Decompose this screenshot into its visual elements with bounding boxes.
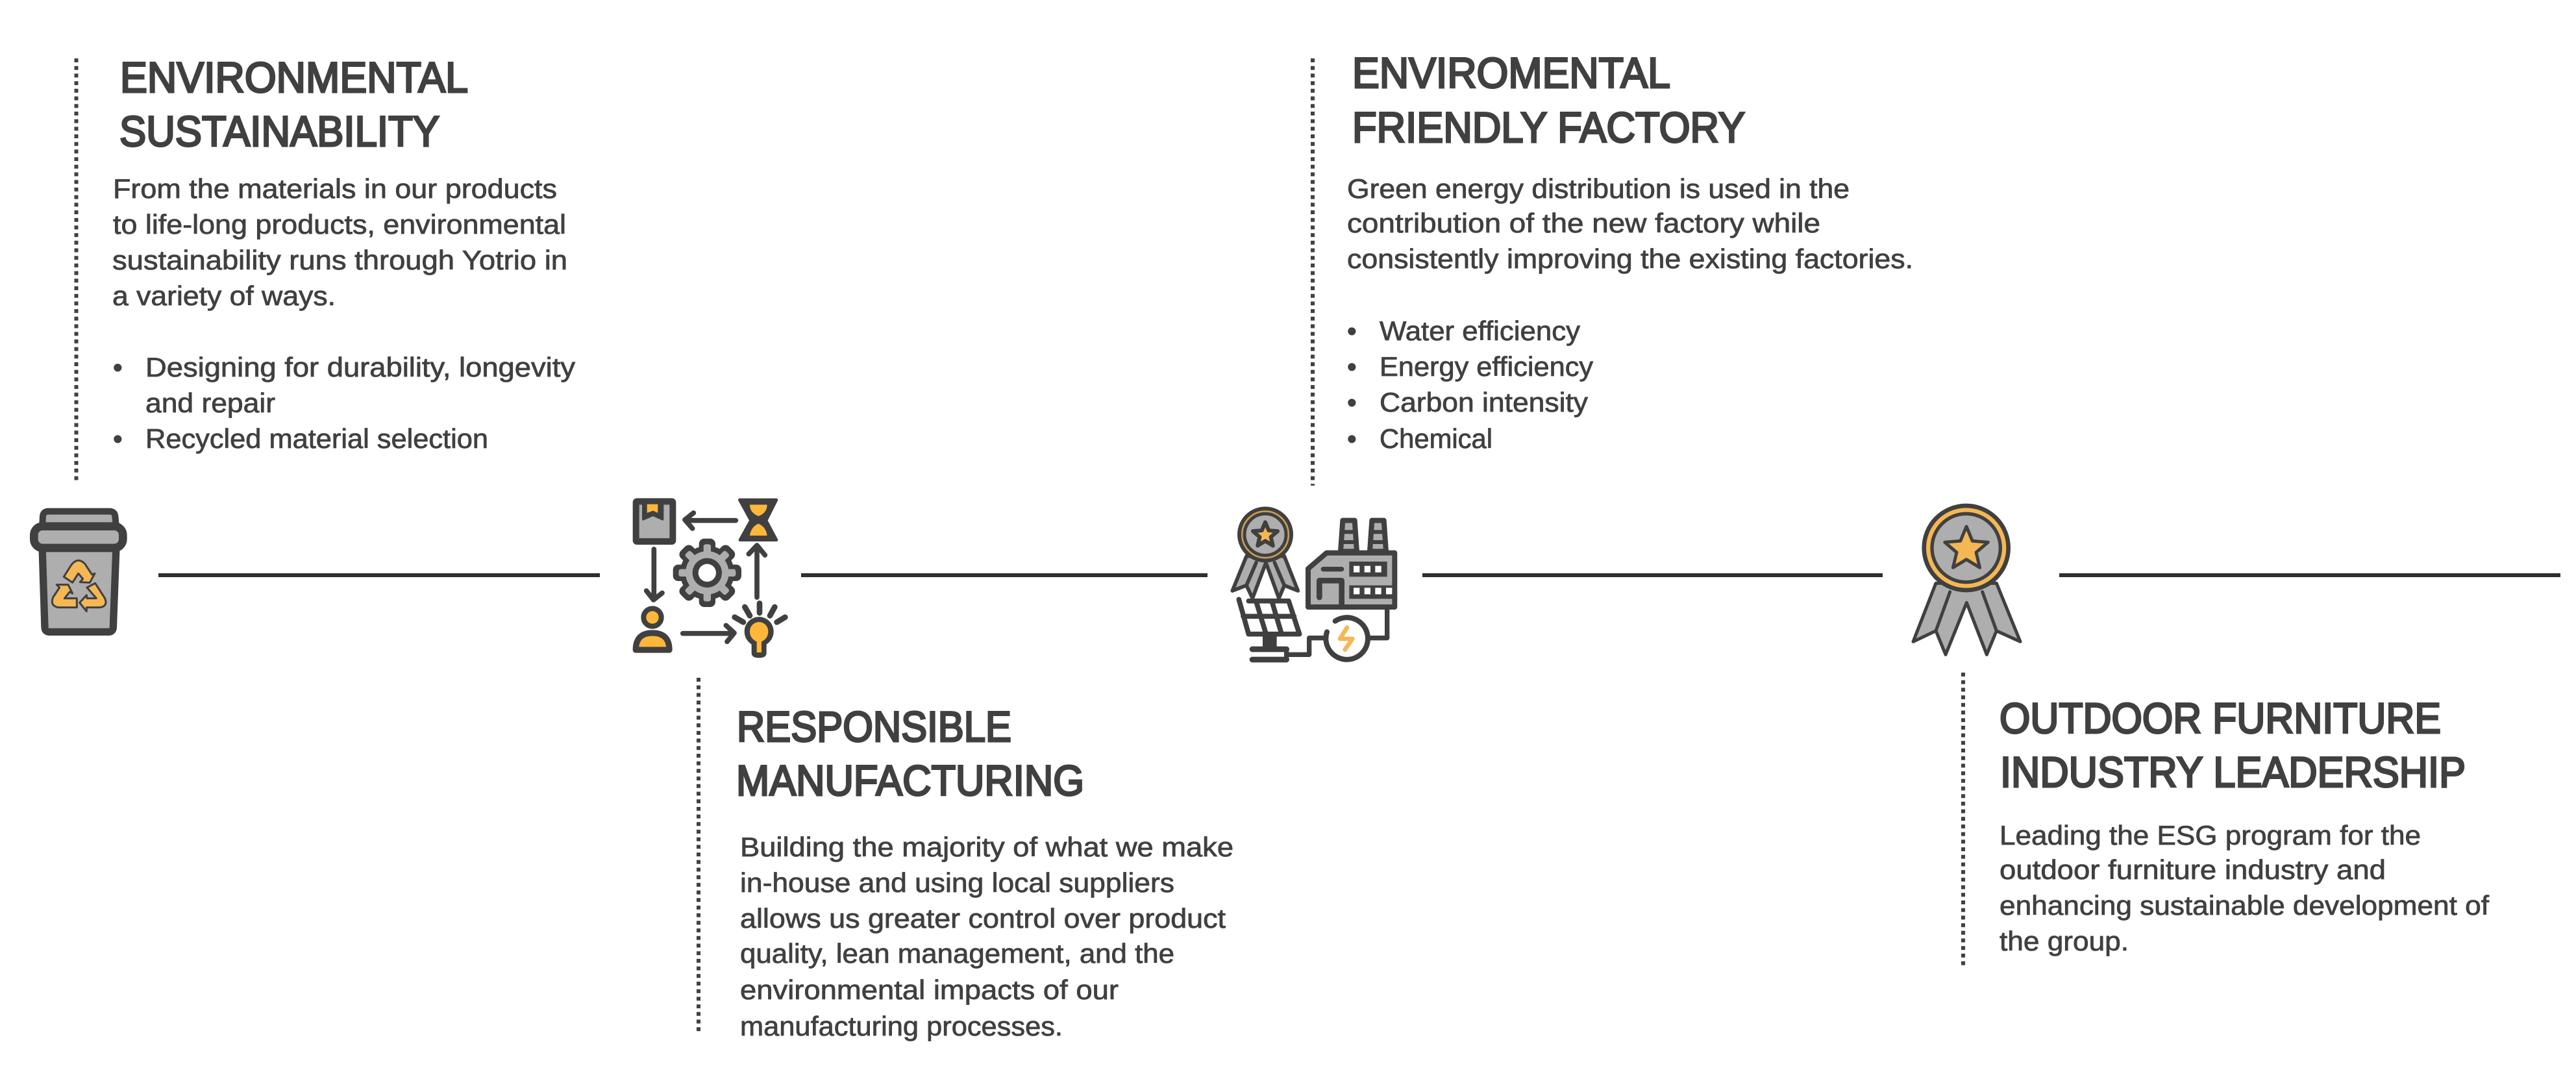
bullet list: environmental sustainability: Designing for durability, longevity	[145, 352, 575, 382]
bullet list: environmental sustainability: •	[113, 423, 123, 454]
panel: responsible manufacturing	[699, 678, 1233, 1041]
heading: environmental sustainability: SUSTAINABILITY	[119, 107, 440, 155]
heading: responsible manufacturing: MANUFACTURING	[736, 756, 1084, 804]
icon: manufacturing process cycle	[636, 500, 785, 658]
icon part: factory	[1308, 521, 1394, 607]
heading: responsible manufacturing: RESPONSIBLE	[737, 702, 1011, 750]
text block: responsible manufacturing description: allows us greater control over product	[740, 903, 1226, 934]
icon part: cycle arrows	[647, 513, 765, 641]
text block: environmental sustainability description: a variety of ways.	[112, 280, 336, 311]
icon part: hourglass	[739, 500, 776, 540]
text block: leadership description: the group.	[2000, 926, 2129, 956]
icon: factory with medal and solar panel	[1232, 508, 1394, 660]
bullet list: environmental sustainability: •	[113, 352, 123, 382]
text block: responsible manufacturing description: Building the majority of what we make	[740, 832, 1233, 862]
icon part: medal	[1232, 508, 1298, 599]
text block: responsible manufacturing description	[740, 832, 1233, 1041]
timeline connector lines	[158, 573, 2560, 577]
text block: factory description: Green energy distribution is used in the	[1347, 173, 1850, 204]
bullet list: environmental sustainability	[113, 352, 575, 454]
heading: outdoor furniture industry leadership: INDUSTRY LEADERSHIP	[2000, 748, 2466, 796]
bullet list: environmental sustainability: Recycled material selection	[145, 423, 488, 454]
text block: environmental sustainability description: to life-long products, environmental	[113, 209, 566, 240]
bullet list: factory efficiencies: Water efficiency	[1380, 316, 1580, 346]
panel: environmental friendly factory	[1313, 49, 1913, 486]
icon: award ribbon	[1913, 506, 2020, 654]
text block: responsible manufacturing description: in-house and using local suppliers	[740, 867, 1174, 898]
heading: environmental sustainability: ENVIRONMENTAL	[120, 53, 468, 101]
text block: leadership description: outdoor furniture industry and	[2000, 854, 2386, 885]
panel: environmental sustainability	[77, 53, 575, 480]
heading: outdoor furniture industry leadership	[2000, 694, 2466, 796]
heading: responsible manufacturing	[736, 702, 1084, 804]
heading: environmental sustainability	[119, 53, 468, 155]
icon part: energy circle	[1326, 608, 1387, 660]
text block: responsible manufacturing description: quality, lean management, and the	[740, 938, 1174, 969]
text block: responsible manufacturing description: environmental impacts of our	[740, 974, 1119, 1005]
text block: leadership description: Leading the ESG program for the	[2000, 820, 2421, 850]
bullet list: factory efficiencies	[1347, 316, 1593, 454]
heading: enviromental friendly factory: FRIENDLY FACTORY	[1352, 103, 1745, 151]
heading: outdoor furniture industry leadership: OUTDOOR FURNITURE	[2000, 694, 2441, 742]
icon part: light bulb	[735, 603, 785, 658]
bullet list: factory efficiencies: Carbon intensity	[1380, 387, 1588, 417]
bullet list: factory efficiencies: •	[1347, 351, 1357, 382]
icon part: box	[636, 501, 673, 541]
bullet list: factory efficiencies: •	[1347, 387, 1357, 417]
text block: environmental sustainability description: sustainability runs through Yotrio in	[112, 245, 567, 275]
icon part: gear	[673, 539, 741, 607]
icon part: person	[636, 608, 669, 650]
icon: recycling bin	[34, 512, 123, 632]
text block: factory description: contribution of the new factory while	[1347, 208, 1820, 238]
text block: environmental sustainability description: From the materials in our products	[113, 173, 557, 204]
heading: enviromental friendly factory	[1352, 49, 1745, 151]
text block: factory description	[1347, 173, 1913, 274]
bullet list: factory efficiencies: Energy efficiency	[1380, 351, 1593, 382]
text block: environmental sustainability description	[112, 173, 567, 311]
text block: leadership description: enhancing sustainable development of	[2000, 890, 2489, 921]
bullet list: factory efficiencies: Chemical	[1380, 423, 1492, 454]
heading: enviromental friendly factory: ENVIROMENTAL	[1352, 49, 1670, 97]
text block: factory description: consistently improving the existing factories.	[1347, 243, 1913, 274]
text block: responsible manufacturing description: manufacturing processes.	[740, 1011, 1063, 1041]
bullet list: environmental sustainability: and repair	[145, 388, 275, 418]
panel: outdoor furniture industry leadership	[1963, 673, 2489, 966]
icon part: solar panel	[1239, 599, 1326, 660]
bullet list: factory efficiencies: •	[1347, 316, 1357, 346]
bullet list: factory efficiencies: •	[1347, 423, 1357, 454]
text block: leadership description	[2000, 820, 2489, 956]
